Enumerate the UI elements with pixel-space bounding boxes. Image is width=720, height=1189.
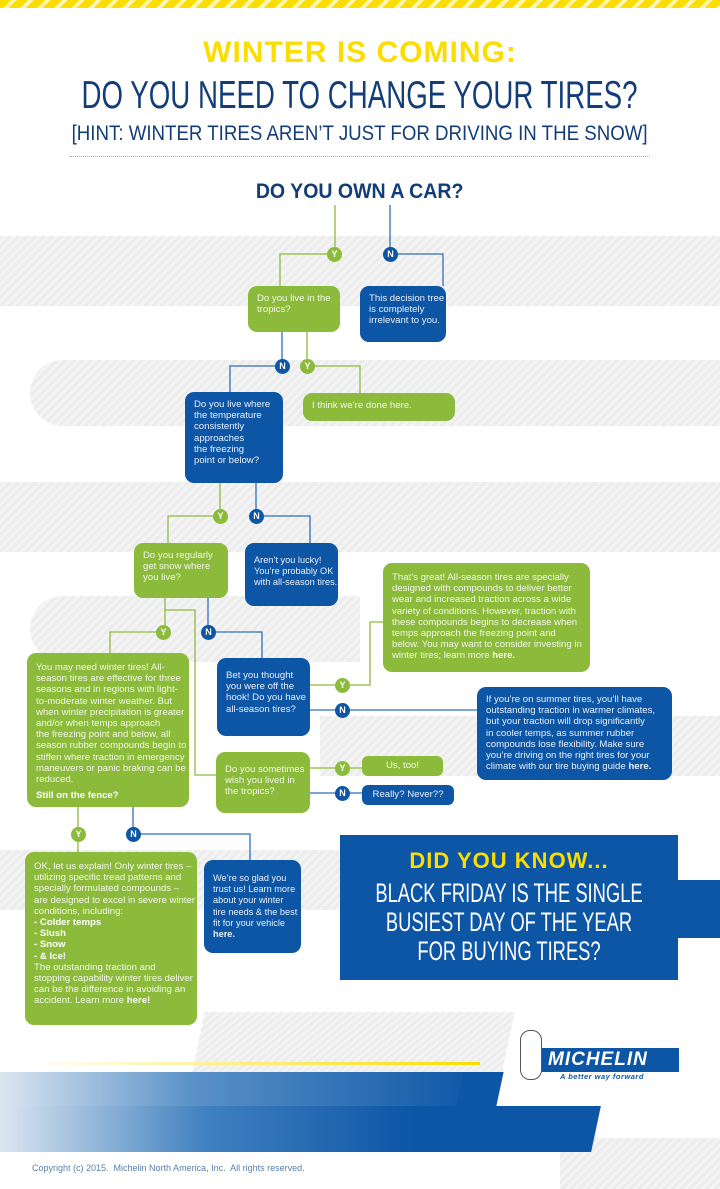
box: let us explain: can be the difference in avoiding an [34,984,185,995]
box: lucky: Aren’t you lucky! [254,555,321,565]
box: summer tires [477,687,672,780]
box: really never [362,785,454,805]
box: freezing: Do you live where [194,399,270,410]
did you know panel [340,835,720,980]
box: bet you thought: Bet you thought [226,670,293,681]
box: that's great: That’s great! All-season tires are specially [392,572,569,583]
box: may need winter tires: season tires are effective for three [36,673,181,684]
box: may need winter tires: when winter precipitation is greater [36,707,184,718]
text: Y [331,249,338,259]
box: wish tropics: wish you lived in [225,775,295,786]
michelin logo: MICHELIN [548,1049,648,1070]
michelin logo [520,1030,679,1081]
box: irrelevant: This decision tree [369,293,444,304]
box: may need winter tires: the freezing point and below, all [36,729,170,740]
box: us too [362,756,443,776]
text: Y [217,511,224,521]
box: irrelevant [360,286,446,342]
box: may need winter tires: and/or when temps approach [36,718,160,729]
did you know text: BLACK FRIDAY IS THE SINGLE [375,878,643,908]
box: freezing: approaches [194,433,244,444]
did you know text: FOR BUYING TIRES? [417,936,601,966]
text: Y [304,361,310,371]
box: let us explain: - Colder temps [34,917,101,928]
box: summer tires: but your traction will drop significantly [486,716,645,727]
title: WINTER IS COMING: [203,36,517,69]
title [72,36,648,145]
box: lucky [245,543,338,606]
box: wish tropics [216,752,310,813]
title: [HINT: WINTER TIRES AREN’T JUST FOR DRIVING IN THE SNOW] [72,122,648,145]
box: let us explain: - & Ice! [34,951,66,962]
box: may need winter tires: Still on the fence? [36,790,119,801]
box: irrelevant: irrelevant to you. [369,315,440,326]
box: freezing: consistently [194,421,244,432]
box: glad you trust us: We’re so glad you [213,873,286,883]
box: us too: Us, too! [386,760,419,771]
text: Y [160,627,166,637]
did you know text [375,878,643,966]
box: irrelevant: is completely [369,304,424,315]
box: bet you thought [217,658,310,736]
copyright: Copyright (c) 2015. Michelin North America, Inc. All rights reserved. [32,1163,305,1173]
box: glad you trust us [204,860,301,953]
box: let us explain: - Snow [34,939,65,950]
circles [71,247,586,842]
box: may need winter tires: to-moderate winter weather. But [36,696,172,707]
box: wish tropics: the tropics? [225,786,275,797]
did you know heading: DID YOU KNOW... [409,848,609,873]
text: N [130,829,137,839]
box: summer tires: compounds lose flexibility. Make sure [486,739,644,750]
box: may need winter tires: stiffen where traction in emergency [36,752,185,763]
box: may need winter tires [27,653,189,807]
box: summer tires: outstanding traction in warmer climates, [486,705,655,716]
box: let us explain: utilizing specific tread patterns and [34,872,181,883]
text: Y [339,763,346,773]
box: let us explain: conditions, including: [34,906,123,917]
text: N [253,511,260,521]
box: that's great: variety of conditions. However, traction with [392,606,576,617]
text: Y [75,829,82,839]
box: let us explain: The outstanding traction and [34,962,156,973]
box: that's great: designed with compounds to deliver better [392,583,572,594]
box: that's great: winter tires; learn more here. [392,650,515,661]
text: N [339,788,346,798]
text: N [279,361,286,371]
box: summer tires: climate with our tire buying guide here. [486,761,651,772]
box: lucky: with all-season tires. [254,577,337,587]
text: N [339,705,346,715]
box: let us explain: OK, let us explain! Only winter tires – [34,861,191,872]
box: let us explain: accident. Learn more here! [34,995,150,1006]
box: glad you trust us: trust us! Learn more [213,884,295,894]
box: tropics: Do you live in the [257,293,331,304]
box: snow: you live? [143,572,181,583]
box: summer tires: If you’re on summer tires, you’ll have [486,694,642,705]
box: freezing: point or below? [194,455,259,466]
box: may need winter tires: seasons and in regions with light- [36,684,178,695]
box: let us explain: are designed to excel in severe winter [34,895,195,906]
box: glad you trust us: here. [213,929,235,939]
box: really never: Really? Never?? [373,789,443,800]
box: that's great: wear and increased traction across a wide [392,594,571,605]
box: freezing [185,392,283,483]
box: bet you thought: you were off the [226,681,294,692]
box: bet you thought: all-season tires? [226,704,296,715]
box: that's great: these compounds begins to decrease when [392,617,577,628]
box: freezing: the temperature [194,410,262,421]
question: do you own a car: DO YOU OWN A CAR? [256,180,464,203]
box: freezing: the freezing [194,444,244,455]
box: bet you thought: hook! Do you have [226,692,306,703]
box: snow [134,543,228,598]
box: snow: get snow where [143,561,210,572]
top stripe [0,0,720,8]
box: let us explain [25,852,197,1025]
box: that's great: below. You may want to consider investing in [392,639,582,650]
box: done [303,393,455,421]
box: summer tires: you’re driving on the right tires for your [486,750,650,761]
footer band [0,1062,601,1152]
box: may need winter tires: reduced. [36,774,73,785]
box: lucky: You’re probably OK [254,566,333,576]
box: may need winter tires: You may need winter tires! All- [36,662,165,673]
box: wish tropics: Do you sometimes [225,764,304,775]
box: done: I think we’re done here. [312,400,412,411]
box: let us explain: - Slush [34,928,66,939]
box: let us explain: specially formulated compounds – [34,883,179,894]
title: DO YOU NEED TO CHANGE YOUR TIRES? [82,74,638,117]
box: tropics: tropics? [257,304,291,315]
box: may need winter tires: season rubber compounds begin to [36,740,186,751]
box: let us explain: stopping capability winter tires deliver [34,973,193,984]
box: summer tires: in cooler temps, as summer rubber [486,728,634,739]
text: Y [339,680,346,690]
box: glad you trust us: about your winter [213,895,283,905]
box: snow: Do you regularly [143,550,213,561]
box: may need winter tires: maneuvers or panic braking can be [36,763,186,774]
box: that's great: temps approach the freezing point and [392,628,556,639]
michelin logo: A better way forward [560,1072,644,1081]
box: tropics [248,286,340,332]
text: N [205,627,212,637]
box: glad you trust us: tire needs & the best [213,907,297,917]
text: N [387,249,394,259]
box: glad you trust us: fit for your vehicle [213,918,285,928]
box: that's great [383,563,590,672]
did you know text: BUSIEST DAY OF THE YEAR [386,907,632,937]
